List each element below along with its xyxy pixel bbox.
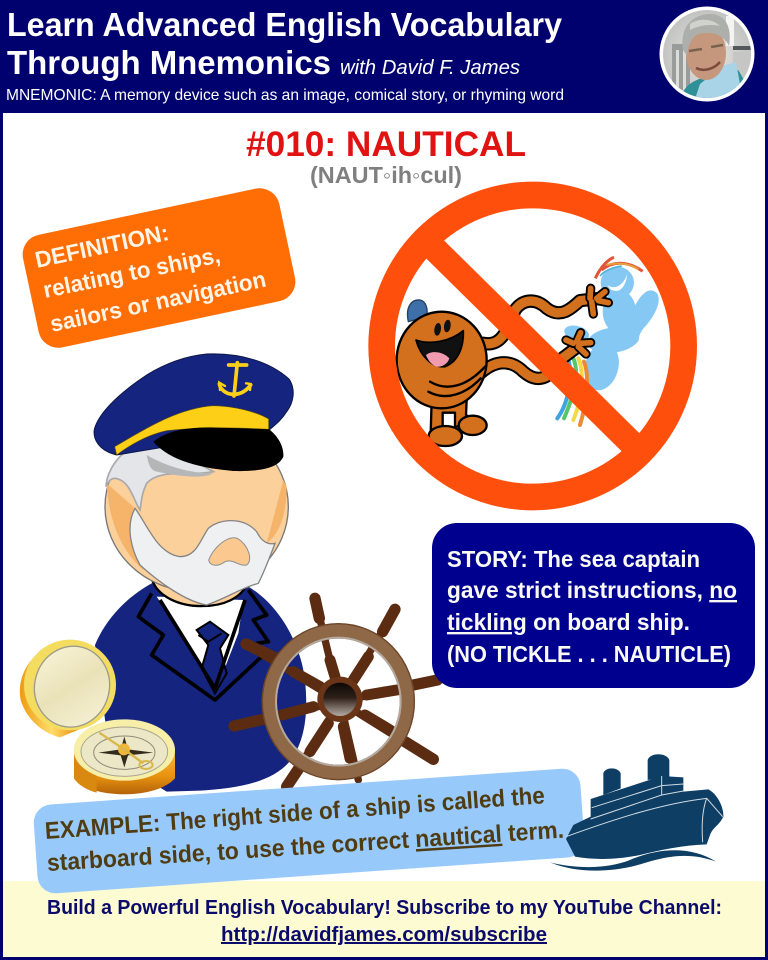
- subscribe link: http://davidfjames.com/subscribe: [221, 924, 547, 946]
- ship wheel: [233, 598, 438, 787]
- definition callout: [19, 185, 299, 351]
- author credit: with David F. James: [340, 57, 520, 79]
- header: [6, 6, 564, 104]
- definition callout: DEFINITION:: [33, 219, 171, 273]
- compass base: [74, 719, 175, 794]
- mnemonic definition line: MNEMONIC: A memory device such as an image, comical story, or rhyming word: [6, 87, 564, 104]
- prohibition sign: [382, 195, 684, 497]
- captain hair: [106, 438, 213, 510]
- story callout: (NO TICKLE . . . NAUTICLE): [447, 641, 731, 667]
- captain nose: [209, 538, 250, 565]
- character body: [397, 312, 487, 408]
- captain beard: [130, 508, 275, 605]
- arm creases: [428, 367, 485, 396]
- word heading: #010: NAUTICAL: [246, 125, 526, 164]
- ship hull: [566, 789, 723, 859]
- cartoon character: [397, 288, 608, 446]
- compass: [20, 638, 175, 794]
- captain neck: [152, 557, 247, 606]
- subscribe call to action: Build a Powerful English Vocabulary! Subscribe to my YouTube Channel:: [47, 897, 722, 919]
- story callout: [432, 523, 755, 688]
- ship deck lines: [566, 776, 723, 842]
- title: [7, 6, 563, 81]
- sea captain illustration: [20, 354, 438, 794]
- captain shirt and tie: [138, 590, 268, 700]
- example callout: EXAMPLE: The right side of a ship is called the: [44, 782, 546, 845]
- footer band: [3, 881, 765, 957]
- character eyes: [433, 323, 442, 336]
- pronunciation: (NAUT◦ih◦cul): [310, 162, 462, 188]
- definition callout: sailors or navigation: [48, 266, 268, 337]
- author portrait: [660, 6, 754, 102]
- white content panel: [3, 113, 765, 881]
- character hat: [408, 300, 427, 322]
- captain head: [105, 422, 288, 592]
- icon: ship: [550, 754, 723, 871]
- story callout: tickling on board ship.: [447, 609, 690, 635]
- character legs and feet: [431, 400, 475, 433]
- definition callout: relating to ships,: [41, 242, 222, 303]
- cartoon pony: [557, 257, 659, 425]
- character arms: [477, 288, 608, 378]
- compass lid: [20, 638, 119, 737]
- example callout: starboard side, to use the correct nautical term.: [46, 817, 565, 877]
- ship funnels: [603, 754, 669, 795]
- story callout: STORY: The sea captain: [447, 546, 700, 572]
- story callout: gave strict instructions, no: [447, 577, 737, 603]
- title: Through Mnemonics: [7, 44, 331, 81]
- pony tail: [557, 358, 587, 425]
- example callout: [33, 767, 585, 895]
- anchor emblem: [219, 363, 251, 396]
- ship wave: [550, 850, 716, 871]
- captain jacket: [95, 583, 306, 792]
- character mouth: [416, 331, 463, 367]
- ship superstructure: [591, 776, 683, 825]
- title: Learn Advanced English Vocabulary: [7, 6, 563, 43]
- captain cap: [94, 354, 293, 471]
- mnemonic image: no tickling sign: [382, 195, 684, 497]
